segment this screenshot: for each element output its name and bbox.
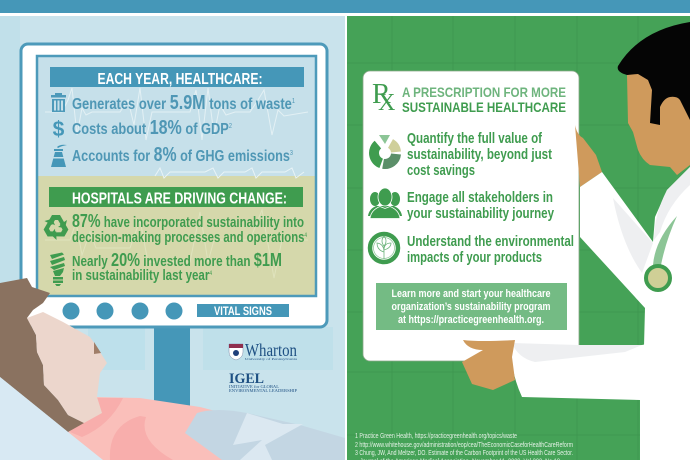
heading: each year: EACH YEAR, HEALTHCARE:	[98, 71, 262, 88]
Rx symbol: X	[378, 90, 395, 116]
face	[627, 60, 690, 175]
panel: monitor: decision-making processes and operations	[72, 230, 370, 246]
stat: waste: 1	[292, 98, 295, 105]
logo: IGEL: INITIATIVE for GLOBAL	[229, 385, 280, 389]
logo: IGEL	[229, 371, 297, 393]
panel: monitor	[21, 44, 327, 327]
icon: factory	[51, 145, 67, 167]
text: quantify: sustainability, beyond just	[407, 146, 552, 163]
text: engage	[407, 189, 554, 222]
stat: GDP: Costs about 18% of GDP	[72, 117, 240, 139]
footnotes: 2 http://www.whitehouse.gov/administration/eop/cea/TheEconomicCaseforHealthCareReform	[355, 442, 573, 449]
stethoscope	[646, 216, 677, 290]
coat body	[580, 167, 690, 460]
icon: pie ring	[374, 135, 396, 164]
logo: Wharton: Wharton	[245, 340, 297, 360]
hand at top of card	[575, 125, 602, 187]
callout: learn more: organization’s sustainability program	[392, 301, 551, 313]
panel: monitor: in sustainability last year	[72, 268, 244, 284]
logo: IGEL: ENVIRONMENTAL LEADERSHIP	[229, 389, 297, 393]
lower hand	[462, 340, 515, 390]
heartbeat lines	[45, 88, 308, 278]
stat: GHG: 3	[290, 150, 293, 157]
icon: recycle	[40, 215, 70, 243]
shirt	[68, 397, 345, 460]
icon: dollar sign: $	[53, 118, 65, 141]
text: quantify: Quantify the full value of	[407, 130, 543, 147]
illustration: doctor	[462, 22, 690, 460]
callout: learn more	[376, 283, 567, 330]
hair	[618, 22, 690, 125]
stat: 20%: Nearly 20% invested more than $1M	[72, 250, 282, 270]
stat: GHG: Accounts for 8% of GHG emissions	[72, 144, 320, 166]
panel: left background	[0, 16, 345, 460]
heading: prescription: SUSTAINABLE HEALTHCARE	[402, 99, 566, 115]
vital sign buttons	[62, 302, 182, 320]
icon: light bulb	[50, 252, 65, 286]
text: understand: impacts of your products	[407, 249, 542, 266]
logo: IGEL: IGEL	[229, 371, 264, 387]
footnotes: 1 Practice Green Health, https://practicegreenhealth.org/topics/waste	[355, 433, 517, 440]
heading: prescription	[402, 84, 566, 115]
icon: people	[368, 188, 402, 218]
coat lapel shading	[613, 167, 690, 273]
screen bottom	[37, 176, 316, 296]
stat: GDP: 2	[229, 123, 232, 130]
nose and lips	[94, 342, 101, 354]
coat sleeve	[512, 335, 690, 460]
stat: waste: Generates over 5.9M tons of waste	[72, 92, 312, 114]
text: understand: Understand the environmental	[407, 233, 574, 250]
text: engage: Engage all stakeholders in	[407, 189, 553, 206]
heading: prescription: A PRESCRIPTION FOR MORE	[402, 84, 566, 100]
illustration: patient	[0, 278, 345, 460]
stat: 87%: 87% have incorporated sustainability into	[72, 211, 304, 231]
footnotes: 3 Chung, JW, And Meltzer, DO. Estimate of the Carbon Footprint of the US Health Care Sector.	[355, 450, 573, 457]
screen top	[37, 56, 316, 176]
monitor stand	[154, 326, 190, 411]
pillow	[0, 377, 103, 460]
icon: leaf ring	[370, 234, 398, 262]
Rx symbol: R	[372, 79, 391, 110]
heading: hospitals	[49, 187, 303, 208]
panel: right background	[347, 16, 690, 460]
Rx symbol	[372, 79, 395, 116]
face	[27, 312, 107, 423]
panel: monitor: 4	[304, 233, 308, 239]
vital signs label: VITAL SIGNS	[214, 306, 272, 318]
hair	[0, 278, 84, 432]
panel: prescription card	[363, 71, 579, 361]
heading: each year	[50, 67, 304, 88]
callout: learn more: at https://practicegreenhealth.org.	[398, 314, 544, 326]
panel: monitor: 4	[209, 271, 213, 277]
footnotes	[355, 433, 573, 460]
text: quantify: cost savings	[407, 162, 475, 179]
heading: hospitals: HOSPITALS ARE DRIVING CHANGE:	[72, 190, 287, 208]
top bar	[0, 0, 690, 13]
text: understand	[407, 233, 574, 266]
callout: learn more: Learn more and start your healthcare	[392, 288, 550, 300]
text: quantify	[407, 130, 552, 179]
icon: trash can	[51, 93, 66, 112]
logo: Wharton	[229, 340, 298, 361]
vital signs label	[197, 304, 289, 318]
logo: Wharton: University of Pennsylvania	[245, 357, 298, 361]
text: engage: your sustainability journey	[407, 205, 554, 222]
blanket	[185, 410, 345, 460]
